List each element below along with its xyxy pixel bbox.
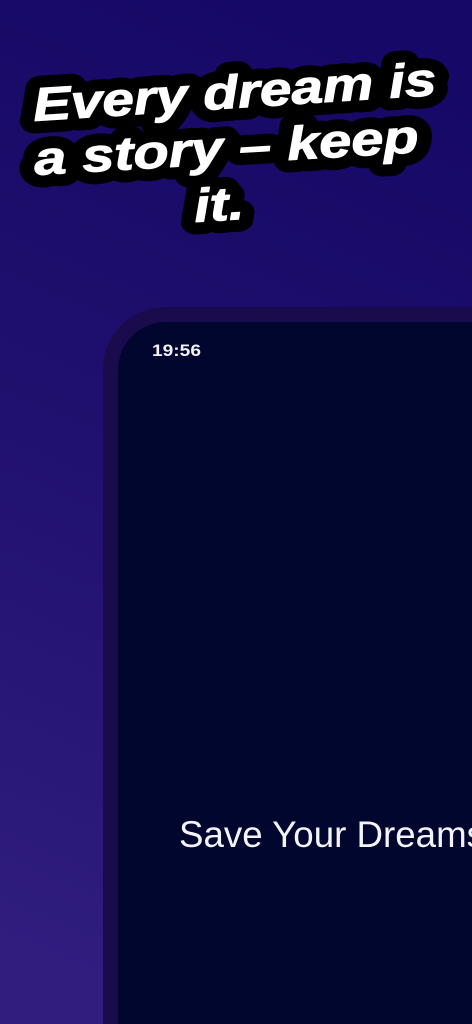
headline: Every dream is — [31, 52, 438, 131]
headline: it. — [192, 176, 246, 232]
phone screen — [118, 322, 472, 1024]
status bar time: 19:56 — [152, 341, 201, 360]
headline: a story – keep — [32, 109, 420, 185]
headline: it. — [192, 176, 246, 232]
headline — [31, 52, 438, 232]
phone bezel — [103, 307, 472, 1024]
headline: Every dream is — [31, 52, 438, 131]
headline: a story – keep — [32, 109, 420, 185]
